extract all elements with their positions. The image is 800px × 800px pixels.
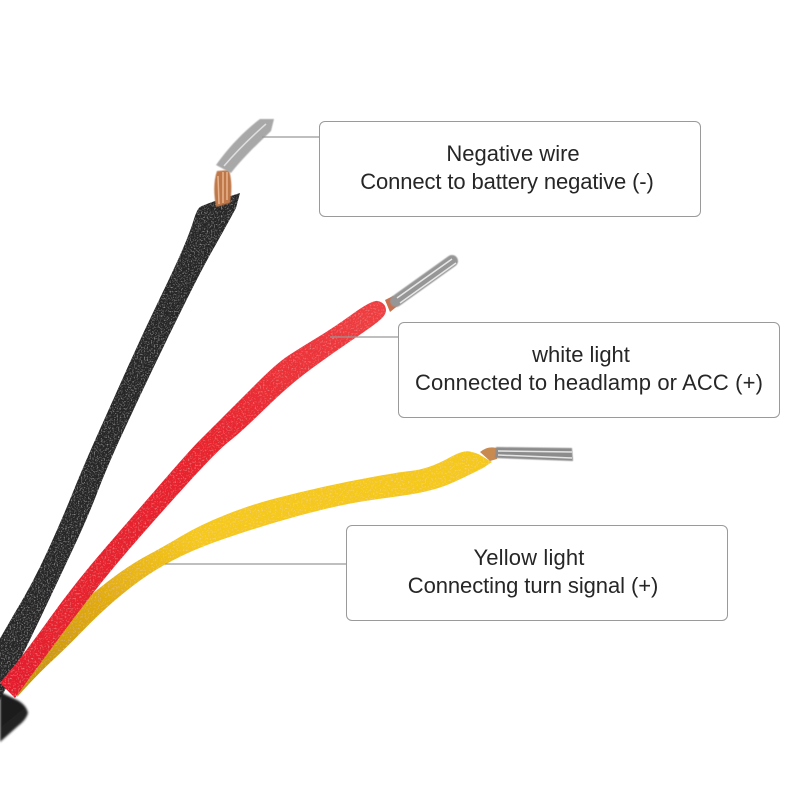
black connector sleeve xyxy=(0,692,28,742)
leader line: yellow light xyxy=(165,563,346,565)
callout: negative wire: Connect to battery negative (-) xyxy=(360,169,654,194)
callout: white light: white light xyxy=(532,342,630,367)
callout: yellow light xyxy=(346,525,728,621)
red wire xyxy=(0,259,456,698)
callout: white light xyxy=(398,322,780,418)
callout: negative wire: Negative wire xyxy=(446,141,580,166)
callout: white light: Connected to headlamp or ACC (+) xyxy=(415,370,763,395)
leader line: negative wire xyxy=(262,136,319,138)
negative wire strands xyxy=(214,119,274,207)
leader line: white light xyxy=(330,336,398,338)
callout: yellow light: Connecting turn signal (+) xyxy=(408,573,658,598)
yellow wire xyxy=(17,447,573,697)
yellow wire strands xyxy=(480,447,573,461)
red wire strands xyxy=(385,259,456,312)
callout: negative wire xyxy=(319,121,701,217)
callout: yellow light: Yellow light xyxy=(473,545,585,570)
black wire xyxy=(0,119,274,700)
